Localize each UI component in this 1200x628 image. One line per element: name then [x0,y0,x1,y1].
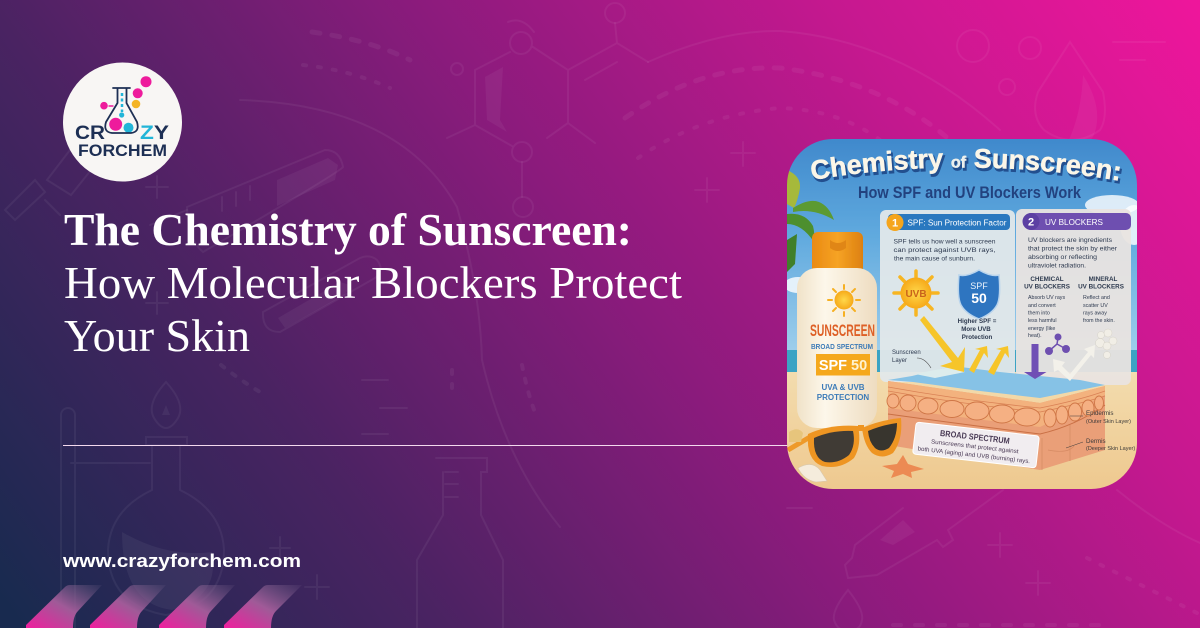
title: Your Skin [64,310,250,361]
divider line [63,445,788,446]
broad spectrum callout: Sunscreens that protect against [931,439,1019,455]
chemical blockers column: CHEMICAL [1030,276,1064,283]
mineral blockers column: from the skin. [1083,318,1115,324]
card heading [811,148,1122,198]
mineral blockers column: Reflect and [1083,295,1110,301]
sky [787,139,1137,350]
UV blockers header: UV BLOCKERS [1045,217,1103,227]
bottle: BROAD SPECTRUM [811,342,873,351]
chemical blockers column: UV BLOCKERS [1024,284,1070,290]
mineral blockers column: rays away [1083,310,1107,316]
broad spectrum callout: BROAD SPECTRUM [940,428,1010,446]
seashell [798,464,827,482]
title [64,204,682,361]
skin layer labels: (Outer Skin Layer) [1086,419,1131,425]
icon: SPF 50 shield [958,270,1000,319]
starfish [882,455,924,478]
skin cross-section [887,366,1105,470]
skin layer labels: Dermis [1086,438,1106,445]
arrow: absorbed UV [1024,344,1046,379]
broad spectrum callout [913,422,1039,468]
SPF description: can protect against UVB rays, [894,247,996,254]
bottle: SPF 50 [819,358,867,374]
title: How Molecular Blockers Protect [64,257,682,308]
UV blockers description: UV blockers are ingredients [1028,237,1112,244]
logo wordmark: ZY [140,123,169,144]
skin layer labels: Epidermis [1086,410,1114,417]
skin cells [887,394,1104,427]
icon: mineral particles [1096,329,1117,358]
sunscreen layer label: Sunscreen [892,350,921,356]
UV blockers header: 2 [1028,216,1034,228]
arrow: reflected UV [1053,345,1095,381]
panel: UV blockers [1016,209,1131,385]
logo wordmark: FORCHEM [78,142,167,160]
panel: SPF [880,210,1015,382]
sunscreen layer label [892,350,931,368]
chemical blockers column: them into [1028,310,1050,316]
SPF header: 1 [892,218,898,230]
logo [63,62,182,182]
bottle: SUNSCREEN [810,321,875,340]
broad spectrum callout: both UVA (aging) and UVB (burning) rays. [917,446,1031,465]
UV blockers header [1022,213,1131,230]
mineral blockers column: UV BLOCKERS [1078,284,1124,290]
mineral blockers column: scatter UV [1083,303,1108,309]
bottle: PROTECTION [817,393,869,402]
icon: flask [100,76,152,133]
SPF description [894,239,996,260]
sunscreen layer label: Layer [892,358,907,364]
SPF caption: Protection [962,334,993,341]
chemical blockers column: Absorb UV rays [1028,295,1065,301]
sand [787,372,1137,492]
heading shadow: Chemistry of Sunscreen: [812,152,1122,184]
SPF caption: Higher SPF = [958,318,997,325]
skin layer labels: (Deeper Skin Layer) [1086,446,1135,452]
logo wordmark: CR [75,123,105,144]
arrows: UVB rays [920,316,1009,375]
chemical blockers column [1024,276,1070,339]
icon: UVB sun: UVB [905,289,927,300]
SPF header [886,214,1010,231]
icon: bottle sun [828,285,860,316]
SPF caption: More UVB [961,326,991,333]
chemical blockers column: less harmful [1028,318,1057,324]
card heading: Chemistry of Sunscreen: [811,148,1120,181]
icon: SPF 50 shield: 50 [971,290,987,306]
chemical blockers column: energy (like [1028,326,1055,332]
logo wordmark [75,123,169,160]
icon: UVB sun [894,271,938,315]
SPF description: the main cause of sunburn. [894,256,975,262]
mineral blockers column [1078,276,1124,324]
palm [787,170,834,272]
card heading: How SPF and UV Blockers Work [858,183,1081,202]
icon: SPF 50 shield: SPF [970,281,988,291]
chemical blockers column: and convert [1028,303,1056,309]
UV blockers description [1028,237,1117,270]
sunglasses [788,418,901,467]
website url: www.crazyforchem.com [62,551,301,571]
UV blockers description: absorbing or reflecting [1028,254,1098,261]
clouds [784,195,1148,293]
sea [787,350,1137,374]
SPF header: SPF: Sun Protection Factor [908,218,1007,228]
SPF caption [958,318,996,339]
mineral blockers column: MINERAL [1089,276,1117,283]
SPF description: SPF tells us how well a sunscreen [894,238,996,246]
bottle [797,232,877,428]
icon: molecule [1046,334,1070,354]
sunscreen layer [888,366,1105,398]
UV blockers description: ultraviolet radiation. [1028,262,1086,270]
title: The Chemistry of Sunscreen: [64,204,632,255]
skin layer labels [1066,410,1135,452]
UV blockers description: that protect the skin by either [1028,246,1117,252]
chemical blockers column: heat). [1028,333,1042,339]
seashell small [789,429,803,442]
infographic thumbnail card [787,139,1137,489]
decorative chevron bars [26,585,302,628]
bottle: UVA & UVB [821,383,865,392]
